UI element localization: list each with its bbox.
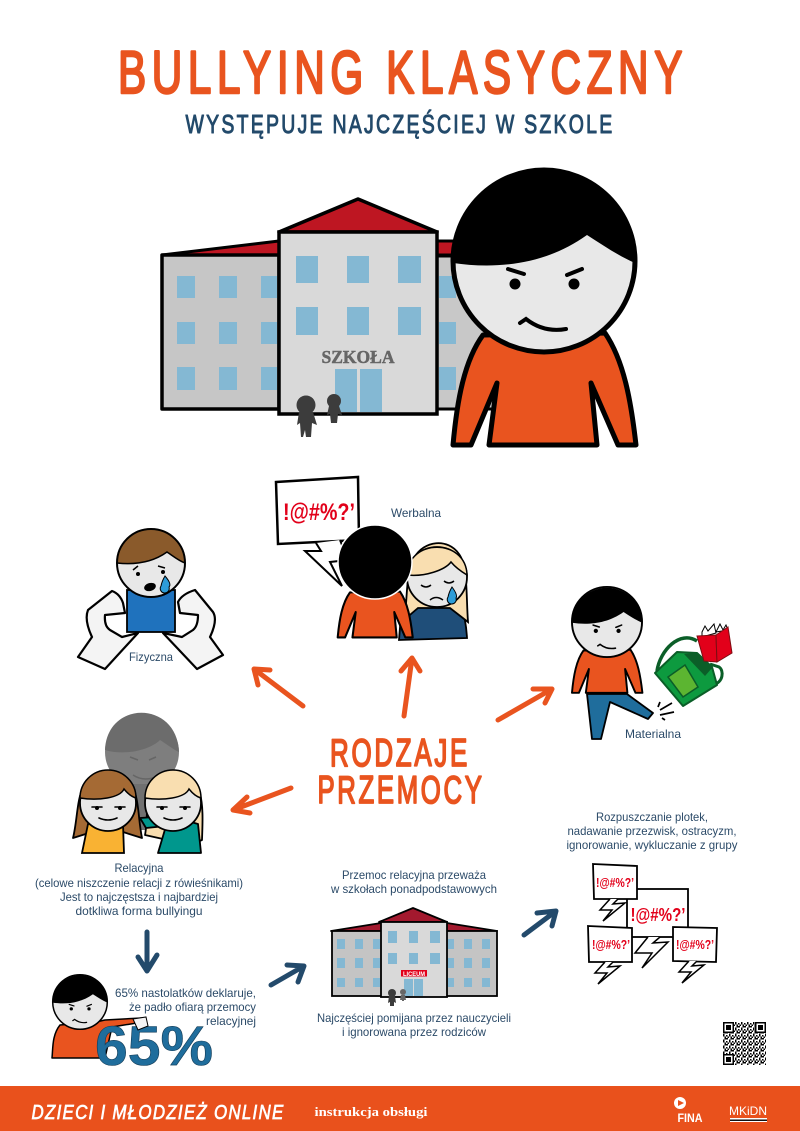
arrow to material [498,689,552,720]
label: Werbalna: Werbalna [391,506,441,520]
illustration: speech bubbles: !@#%?’ [630,905,686,925]
kicked backpack [655,624,732,720]
arrow to relational [233,788,291,813]
footer band [0,1086,800,1131]
MKiDN logo: MKiDN [729,1104,767,1118]
label: Fizyczna: Fizyczna [129,650,173,664]
arrow to physical [254,669,303,706]
heading: types of violence: RODZAJE [330,732,470,775]
heading: types of violence: PRZEMOCY [318,769,484,812]
text: relational description [35,861,243,918]
text: forms of relational violence: ignorowanie, wykluczanie z grupy [566,838,738,852]
illustration: speech bubbles [588,864,717,984]
illustration: speech bubbles: !@#%?’ [596,876,634,890]
text: teachers and parents note [317,1011,511,1039]
65 percent figure: 65% [95,1014,213,1077]
school sign: SZKOŁA [322,347,394,367]
text: 65% statistic: 65% nastolatków deklaruje, [115,986,256,1000]
speech bubble [276,477,359,586]
illustration: high school [331,908,497,1006]
school sign [401,970,427,978]
illustration: angry boy [453,170,636,445]
illustration: boy tearing 65% [52,975,213,1077]
FINA logo: FINA [678,1111,703,1125]
FINA logo [674,1097,703,1125]
heading: types of violence [318,732,484,812]
text: forms of relational violence: Rozpuszczanie plotek, [596,810,708,824]
QR code [723,1022,766,1065]
text: high school note: w szkołach ponadpodstawowych [330,882,497,896]
arrow down [138,932,157,971]
text: high school note: Przemoc relacyjna przeważa [342,868,486,882]
text: relational description: Relacyjna [114,861,164,875]
text: forms of relational violence: nadawanie przezwisk, ostracyzm, [568,824,736,838]
illustration: material violence [572,587,732,741]
text: relational description: (celowe niszczenie relacji z rówieśnikami) [35,876,243,890]
school sign: LICEUM [403,972,425,978]
text: forms of relational violence [566,810,738,852]
arrow to bubbles [524,911,556,935]
footer subtitle: instrukcja obsługi [314,1104,428,1119]
text: 65% statistic [115,986,256,1028]
illustration: relational violence [73,713,203,853]
text: high school note [330,868,497,896]
label: Materialna: Materialna [625,727,681,741]
illustration: physical violence [78,529,223,669]
text: teachers and parents note: Najczęściej pomijana przez nauczycieli [317,1011,511,1025]
arrow to verbal [401,658,420,716]
text: 65% statistic: że padło ofiarą przemocy [129,1000,256,1014]
speech bubble: !@#%?’ [283,499,355,526]
footer title: DZIECI I MŁODZIEŻ ONLINE [32,1102,284,1124]
arrow to high school [271,965,304,985]
text: teachers and parents note: i ignorowana przez rodziców [342,1025,486,1039]
text: relational description: dotkliwa forma bullyingu [76,904,202,918]
illustration: speech bubbles: !@#%?’ [592,938,630,952]
text: relational description: Jest to najczęstsza i najbardziej [60,890,218,904]
illustration: school building [162,199,495,437]
illustration: verbal violence [276,477,468,640]
subtitle: WYSTĘPUJE NAJCZĘŚCIEJ W SZKOLE [186,109,614,139]
illustration: speech bubbles: !@#%?’ [676,938,714,952]
text: 65% statistic: relacyjnej [206,1014,256,1028]
